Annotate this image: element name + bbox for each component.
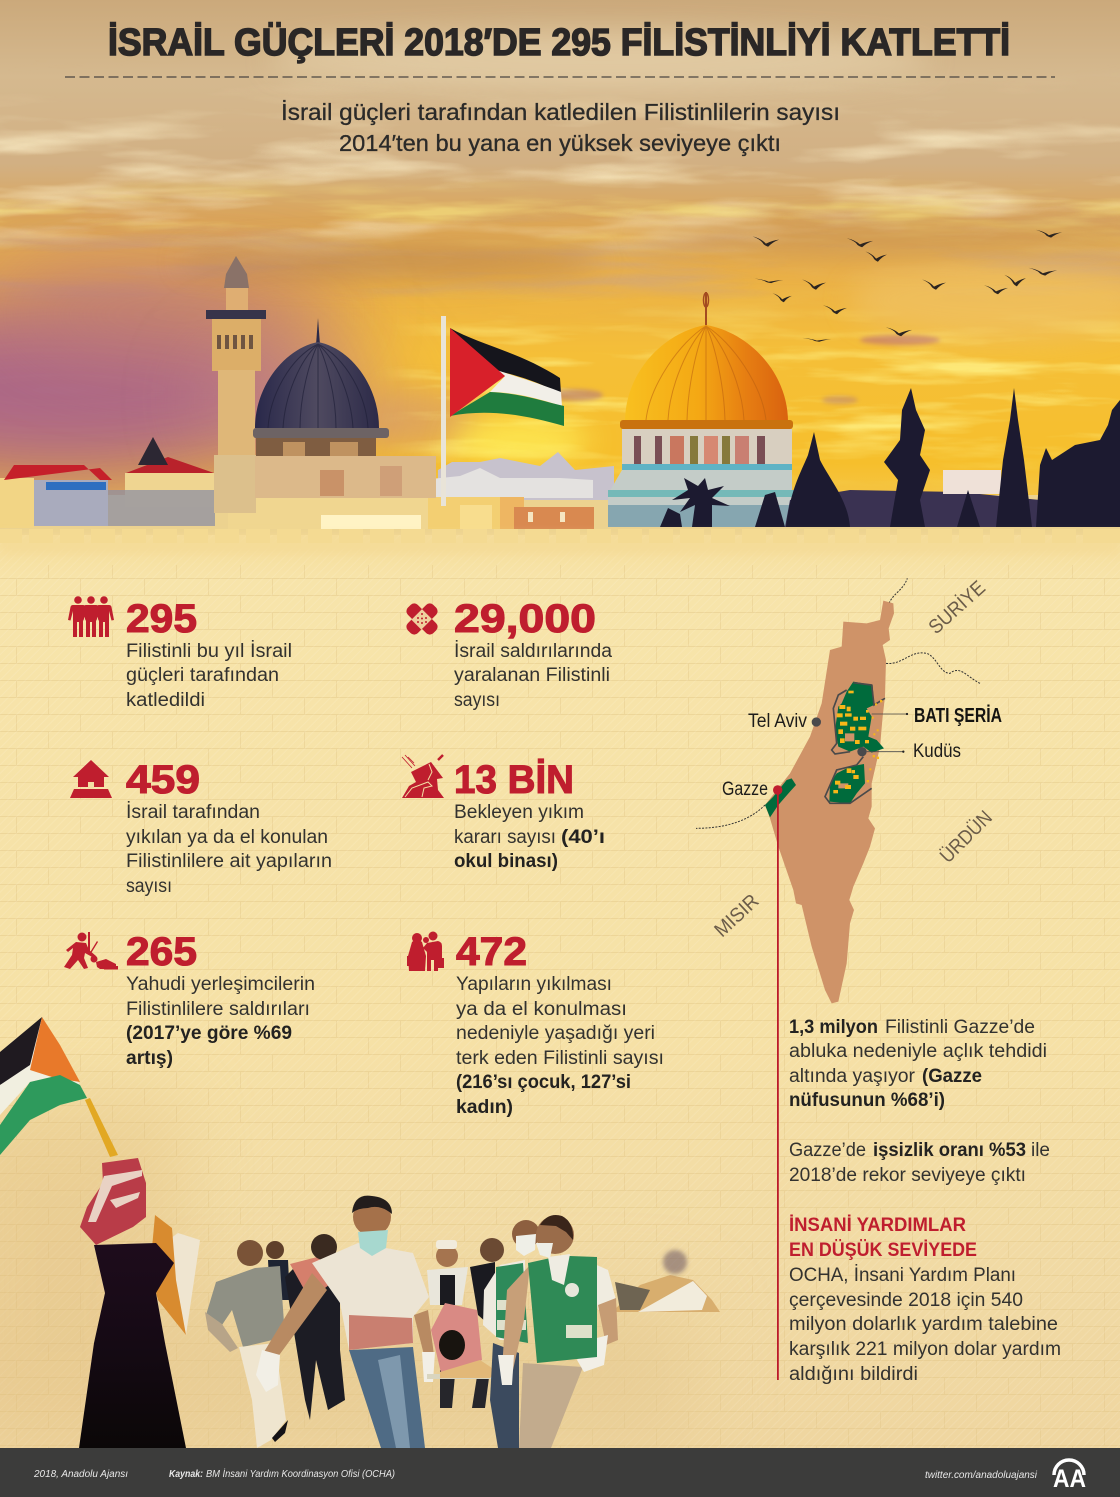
panel: humanitarian aid text: karşılık 221 milyon dolar yardım bbox=[789, 1339, 1061, 1360]
wall crenellations bbox=[0, 529, 1120, 554]
panel: statistic 295: güçleri tarafından bbox=[126, 665, 279, 686]
panel: humanitarian aid text: EN DÜŞÜK SEVİYEDE bbox=[789, 1240, 977, 1261]
icon: collapsing house bbox=[402, 755, 444, 798]
subtitle: İsrail güçleri tarafından katledilen Filistinlilerin sayısı bbox=[281, 99, 840, 125]
panel: statistic 13 BİN: (40’ı bbox=[561, 827, 605, 848]
central medic bbox=[256, 1196, 435, 1448]
panel: statistic 295: Filistinli bu yıl İsrail bbox=[126, 641, 292, 662]
flag bbox=[0, 1017, 118, 1157]
source: BM İnsani Yardım Koordinasyon Ofisi (OCHA) bbox=[206, 1468, 395, 1480]
panel: statistic 472: ya da el konulması bbox=[456, 999, 627, 1020]
panel: statistic 472: Yapıların yıkılması bbox=[456, 974, 612, 995]
panel: statistic 459: 459 bbox=[126, 758, 200, 802]
panel: statistic 29,000 bbox=[404, 597, 612, 711]
panel: statistic 459: yıkılan ya da el konulan bbox=[126, 827, 328, 848]
panel: statistic 265: Yahudi yerleşimcilerin bbox=[126, 974, 315, 995]
panel: humanitarian aid text: aldığını bildirdi bbox=[789, 1364, 918, 1385]
map labels bbox=[710, 576, 1002, 942]
city buildings bbox=[0, 437, 1120, 535]
panel: statistic 13 BİN bbox=[402, 755, 605, 872]
medic in green vest, rear bbox=[483, 1220, 540, 1448]
panel: Gaza text: abluka nedeniyle açlık tehdidi bbox=[789, 1041, 1047, 1062]
West Bank bbox=[825, 682, 885, 803]
panel: statistic 265: Filistinlilere saldırıları bbox=[126, 999, 310, 1020]
panel: humanitarian aid text: OCHA, İnsani Yardım Planı bbox=[789, 1265, 1016, 1286]
subtitle: 2014′ten bu yana en yüksek seviyeye çıktı bbox=[339, 130, 781, 156]
panel: Gaza text: nüfusunun %68’i) bbox=[789, 1090, 945, 1111]
icon: attacker and victim bbox=[64, 932, 118, 970]
wounded patient on stretcher bbox=[427, 1303, 507, 1379]
icon: three people bbox=[68, 596, 114, 637]
source: Kaynak: bbox=[169, 1469, 203, 1480]
map labels: SURİYE bbox=[924, 576, 990, 639]
panel: humanitarian aid text: İNSANİ YARDIMLAR bbox=[789, 1215, 966, 1236]
panel: statistic 265: 265 bbox=[126, 930, 197, 974]
twitter handle: twitter.com/anadoluajansi bbox=[925, 1470, 1038, 1481]
panel: statistic 13 BİN: okul binası) bbox=[454, 851, 558, 872]
panel: Gaza text: altında yaşıyor bbox=[789, 1066, 916, 1087]
subtitle bbox=[281, 99, 840, 156]
panel: brick paper background bbox=[0, 535, 1120, 1448]
panel: Gaza text bbox=[789, 1017, 1050, 1186]
panel: humanitarian aid text: milyon dolarlık yardım talebine bbox=[789, 1314, 1058, 1335]
map labels: ÜRDÜN bbox=[936, 807, 997, 868]
panel: Gaza text: (Gazze bbox=[922, 1066, 982, 1087]
panel: Gaza text: işsizlik oranı %53 bbox=[873, 1140, 1026, 1161]
copyright: 2018, Anadolu Ajansı bbox=[33, 1469, 128, 1480]
panel: statistic 13 BİN: kararı sayısı bbox=[454, 827, 556, 848]
poster bbox=[155, 1233, 200, 1335]
map labels: BATI ŞERİA bbox=[914, 704, 1002, 727]
leader lines bbox=[867, 714, 907, 752]
panel: statistic 13 BİN: 13 BİN bbox=[454, 758, 574, 802]
medics carrying wounded illustration bbox=[205, 1196, 720, 1448]
Gaza strip bbox=[765, 778, 796, 817]
icon: displaced family bbox=[407, 932, 444, 971]
medic in green vest, front bbox=[498, 1215, 618, 1448]
panel: statistic 29,000: 29,000 bbox=[454, 597, 596, 641]
minaret bbox=[206, 256, 266, 513]
panel: statistic 295: 295 bbox=[126, 597, 197, 641]
rear men bbox=[266, 1234, 504, 1420]
rubble and crowd in distance bbox=[612, 1250, 720, 1312]
panel: humanitarian aid text: çerçevesinde 2018 için 540 bbox=[789, 1290, 1023, 1311]
map labels: Tel Aviv bbox=[748, 711, 807, 732]
panel: statistic 29,000: yaralanan Filistinli bbox=[454, 665, 610, 686]
panel: statistic 459: Filistinlilere ait yapıların bbox=[126, 851, 332, 872]
icon: house bbox=[70, 760, 112, 798]
panel: statistic 459 bbox=[70, 758, 332, 897]
map labels: Kudüs bbox=[913, 741, 961, 762]
panel: statistic 29,000: sayısı bbox=[454, 690, 500, 711]
panel: sunset sky and Jerusalem skyline bbox=[0, 0, 1120, 545]
birds bbox=[753, 230, 1062, 342]
panel: statistic 295 bbox=[68, 596, 292, 711]
country shape bbox=[765, 601, 894, 1003]
panel: statistic 459: sayısı bbox=[126, 876, 172, 897]
panel: Gaza text: 1,3 milyon bbox=[789, 1017, 878, 1038]
panel: statistic 472: 472 bbox=[456, 930, 527, 974]
Gaza red pointer line bbox=[773, 785, 782, 1380]
panel: statistic 472: terk eden Filistinli sayısı bbox=[456, 1048, 664, 1069]
dashed borders bbox=[696, 578, 980, 828]
panel: statistic 472 bbox=[407, 930, 664, 1118]
panel: statistic 265 bbox=[64, 930, 315, 1069]
robe bbox=[79, 1243, 186, 1448]
panel: statistic 29,000: İsrail saldırılarında bbox=[454, 641, 612, 662]
panel: statistic 265: artış) bbox=[126, 1048, 173, 1069]
panel: Gaza text: ile bbox=[1031, 1140, 1050, 1161]
panel: Gaza text: Gazze’de bbox=[789, 1140, 866, 1161]
panel: statistic 459: İsrail tarafından bbox=[126, 802, 260, 823]
footer bar bbox=[0, 1448, 1120, 1497]
panel: humanitarian aid text bbox=[789, 1215, 1061, 1385]
left man in grey shirt bbox=[205, 1240, 288, 1448]
map of Palestine bbox=[696, 576, 1002, 1003]
panel: statistic 472: nedeniyle yaşadığı yeri bbox=[456, 1023, 655, 1044]
title: İSRAİL GÜÇLERİ 2018′DE 295 FİLİSTİNLİYİ KATLETTİ bbox=[108, 21, 1010, 64]
icon: crossed bandages bbox=[404, 601, 440, 637]
panel: statistic 295: katledildi bbox=[126, 690, 205, 711]
map labels: MISIR bbox=[710, 890, 763, 942]
Dome of the Rock bbox=[608, 292, 794, 527]
panel: statistic 13 BİN: Bekleyen yıkım bbox=[454, 802, 584, 823]
head scarf bbox=[80, 1158, 146, 1245]
panel: statistic 265: (2017’ye göre %69 bbox=[126, 1023, 292, 1044]
woman with flag illustration bbox=[0, 1017, 200, 1448]
map labels: Gazze bbox=[722, 779, 768, 800]
panel: statistic 472: (216’sı çocuk, 127’si bbox=[456, 1072, 631, 1093]
icon: Anadolu Agency logo: AA bbox=[1053, 1465, 1086, 1493]
panel: Gaza text: Filistinli Gazze’de bbox=[885, 1017, 1035, 1038]
Palestinian flag bbox=[441, 316, 564, 506]
panel: statistic 472: kadın) bbox=[456, 1097, 513, 1118]
dark dome mosque bbox=[253, 318, 436, 498]
trees bbox=[660, 388, 1120, 527]
panel: Gaza text: 2018’de rekor seviyeye çıktı bbox=[789, 1165, 1026, 1186]
